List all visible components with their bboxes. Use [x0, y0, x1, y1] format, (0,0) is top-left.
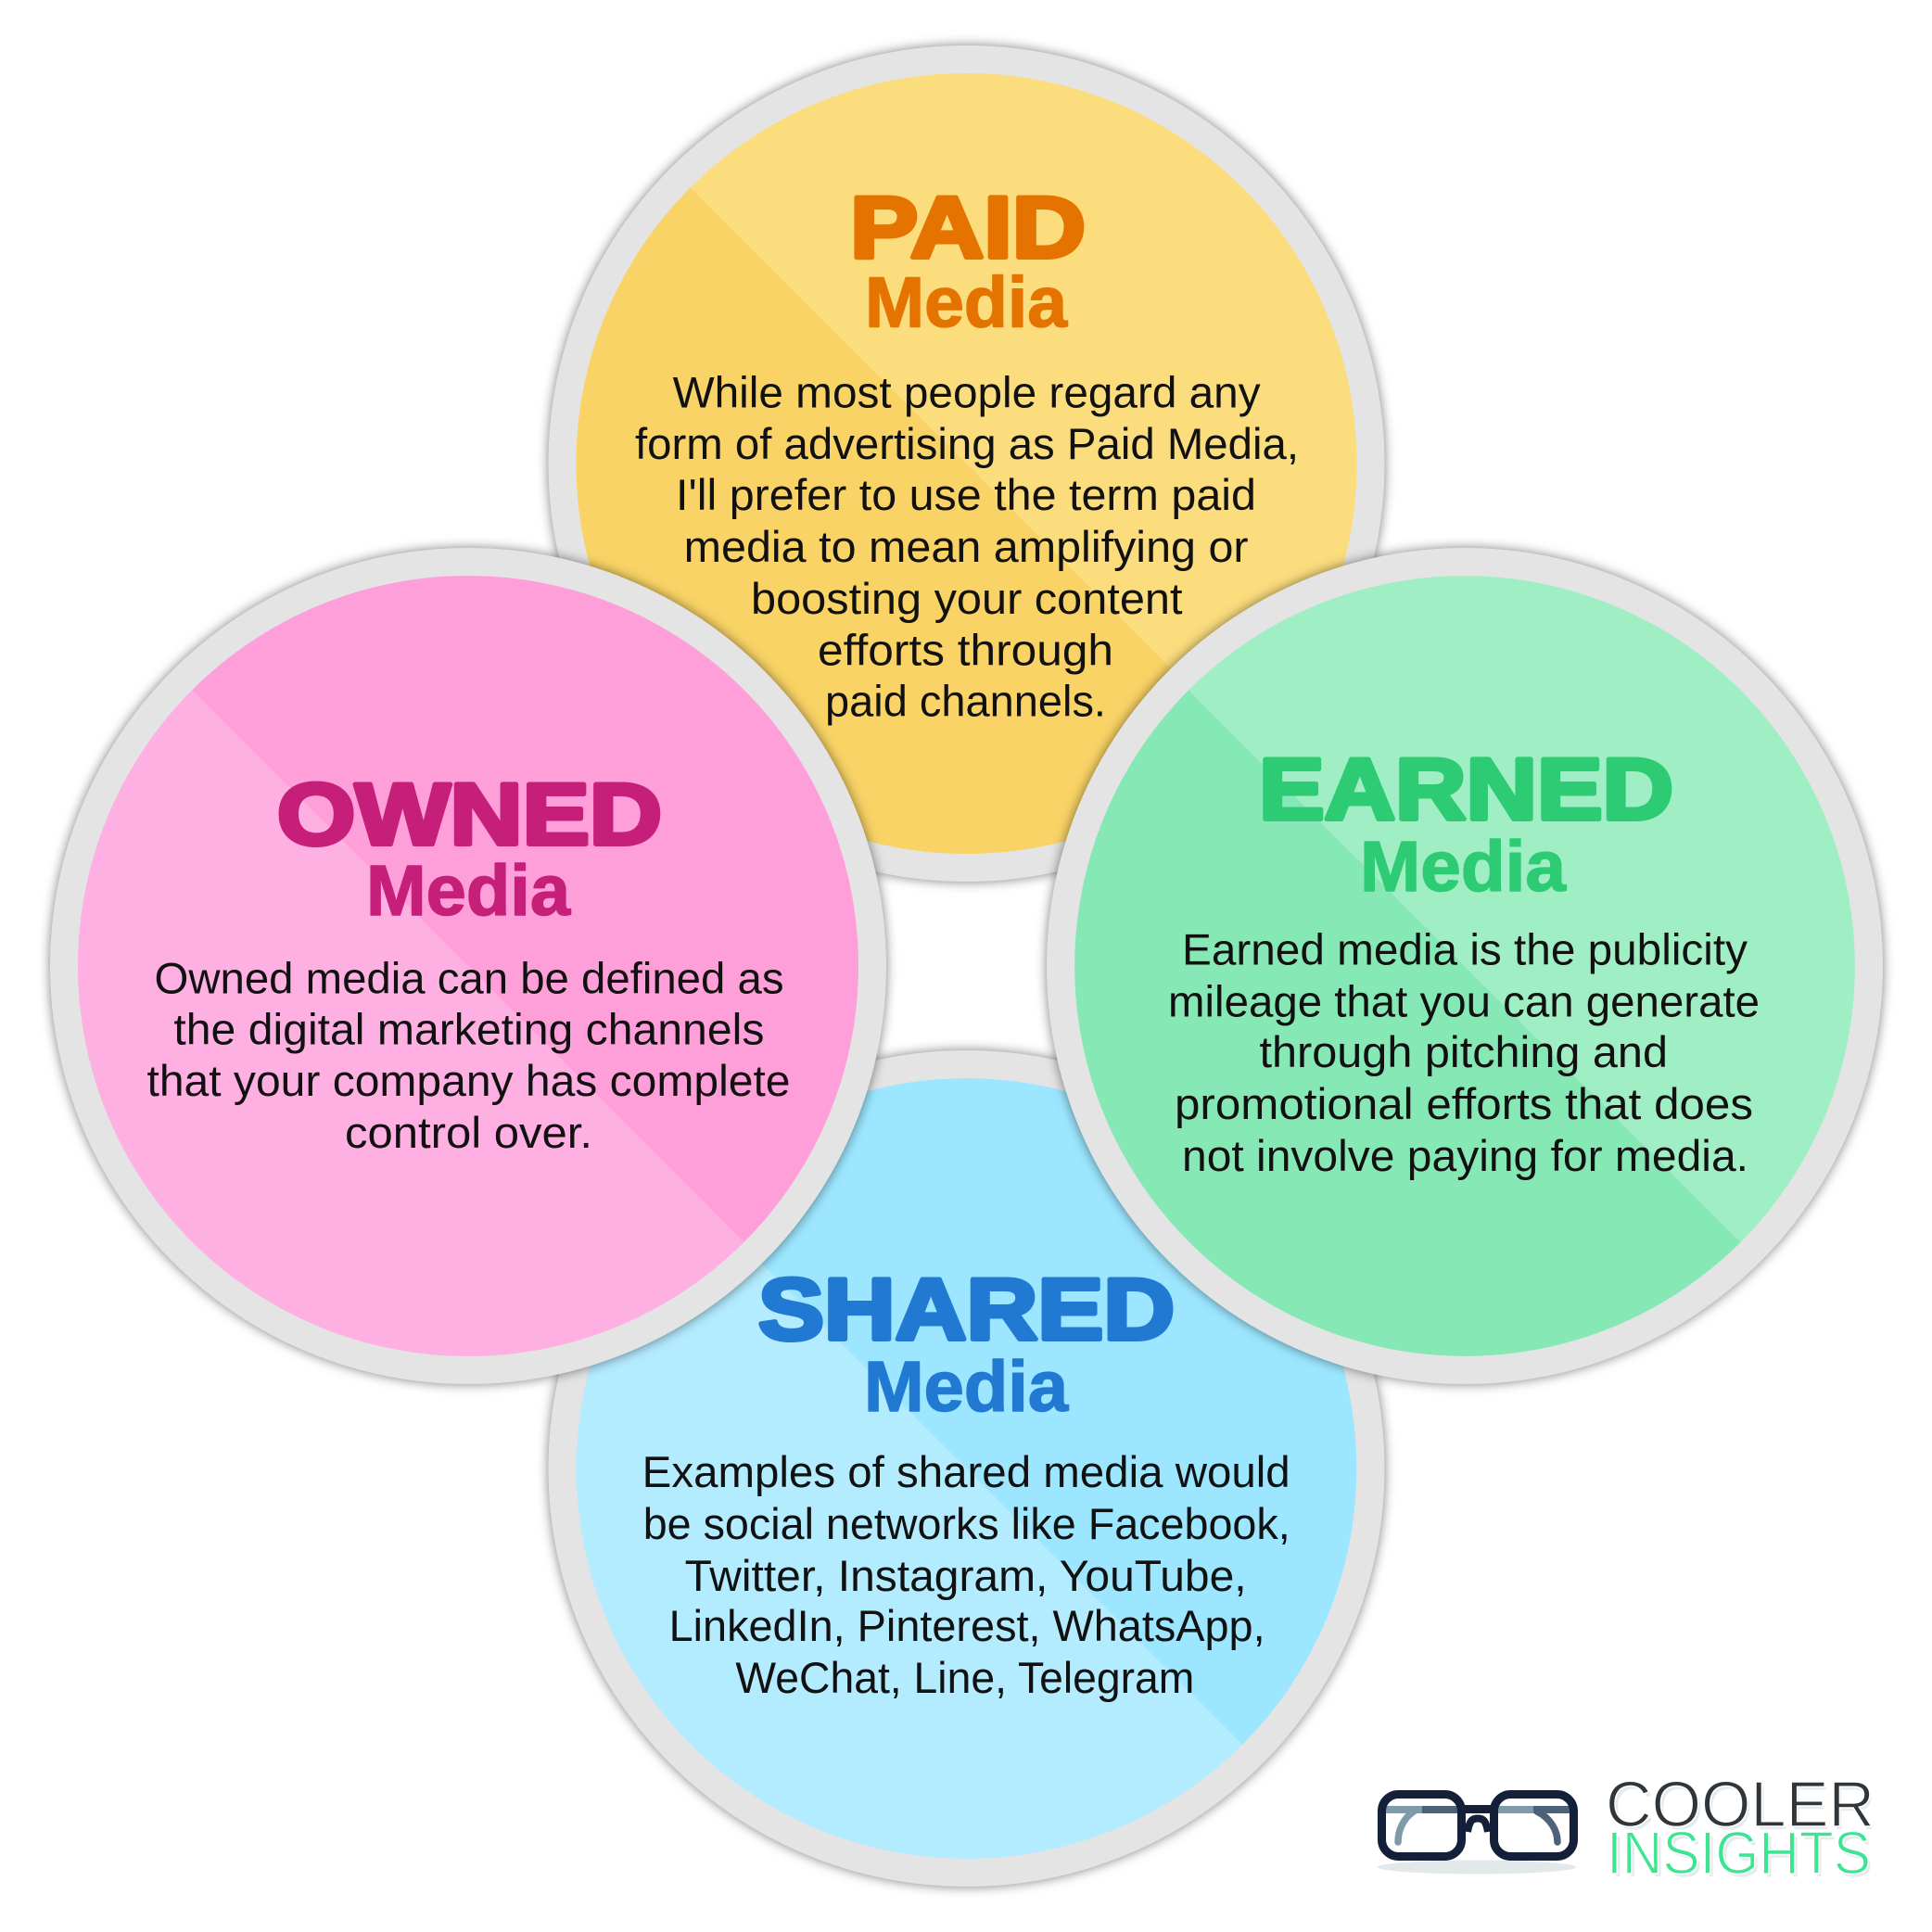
subheading: earned media: Media	[1360, 827, 1567, 907]
text block: paid description: efforts through	[818, 626, 1113, 675]
subheading: paid media: Media	[865, 263, 1068, 343]
wordmark: insights: INSIGHTS	[1607, 1819, 1871, 1887]
heading: earned: EARNED	[1259, 740, 1673, 838]
text block: paid description: While most people regard any	[673, 367, 1261, 417]
subheading: owned media: Media	[366, 851, 571, 931]
circle ring: earned	[1047, 548, 1883, 1384]
text block: owned description: that your company has complete	[146, 1056, 791, 1105]
circle ring: shared	[549, 1050, 1385, 1887]
text block: paid description	[635, 367, 1299, 725]
text block: earned description: Earned media is the publicity	[1182, 925, 1748, 973]
icon: glasses	[1378, 1795, 1576, 1875]
circle fill: shared	[577, 1078, 1356, 1859]
wordmark: cooler: COOLER	[1606, 1768, 1875, 1840]
circle fill: earned	[1074, 576, 1855, 1356]
wordmark: cooler: COOLER	[1609, 1772, 1876, 1844]
subheading: shared media: Media	[864, 1347, 1069, 1427]
heading: owned: OWNED	[277, 766, 662, 862]
text block: earned description: promotional efforts that does	[1175, 1079, 1753, 1128]
logo: cooler insights	[1378, 1768, 1876, 1890]
text block: paid description: boosting your content	[751, 574, 1183, 623]
circle ring: owned	[50, 548, 886, 1384]
circle fill: paid	[576, 73, 1357, 854]
text block: earned description: mileage that you can generate	[1168, 977, 1760, 1025]
text block: owned description: control over.	[345, 1108, 592, 1157]
text block: owned description	[146, 953, 791, 1157]
panel: paid media	[549, 45, 1385, 882]
text block: shared description: LinkedIn, Pinterest, WhatsApp,	[669, 1601, 1265, 1650]
text block: paid description: I'll prefer to use the term paid	[676, 470, 1256, 519]
heading: paid: PAID	[850, 178, 1086, 276]
circle ring: paid	[549, 45, 1385, 882]
heading: shared: SHARED	[758, 1261, 1175, 1357]
panel: shared media	[549, 1050, 1385, 1887]
text block: shared description: WeChat, Line, Telegram	[735, 1653, 1194, 1702]
text block: earned description: not involve paying for media.	[1182, 1131, 1748, 1180]
text block: owned description: Owned media can be defined as	[154, 953, 784, 1003]
text block: paid description: form of advertising as Paid Media,	[635, 419, 1299, 468]
text block: paid description: paid channels.	[825, 677, 1106, 725]
text block: paid description: media to mean amplifying or	[684, 522, 1249, 571]
text block: shared description: be social networks like Facebook,	[643, 1499, 1290, 1548]
wordmark: insights: INSIGHTS	[1610, 1823, 1874, 1890]
panel: earned media	[1047, 548, 1883, 1384]
text block: earned description	[1168, 925, 1760, 1180]
text block: earned description: through pitching and	[1259, 1027, 1668, 1076]
text block: owned description: the digital marketing channels	[173, 1005, 764, 1053]
panel: owned media	[50, 548, 886, 1384]
circle fill: owned	[78, 576, 858, 1356]
text block: shared description: Twitter, Instagram, YouTube,	[685, 1551, 1247, 1600]
text block: shared description: Examples of shared media would	[642, 1447, 1290, 1496]
text block: shared description	[642, 1447, 1290, 1702]
